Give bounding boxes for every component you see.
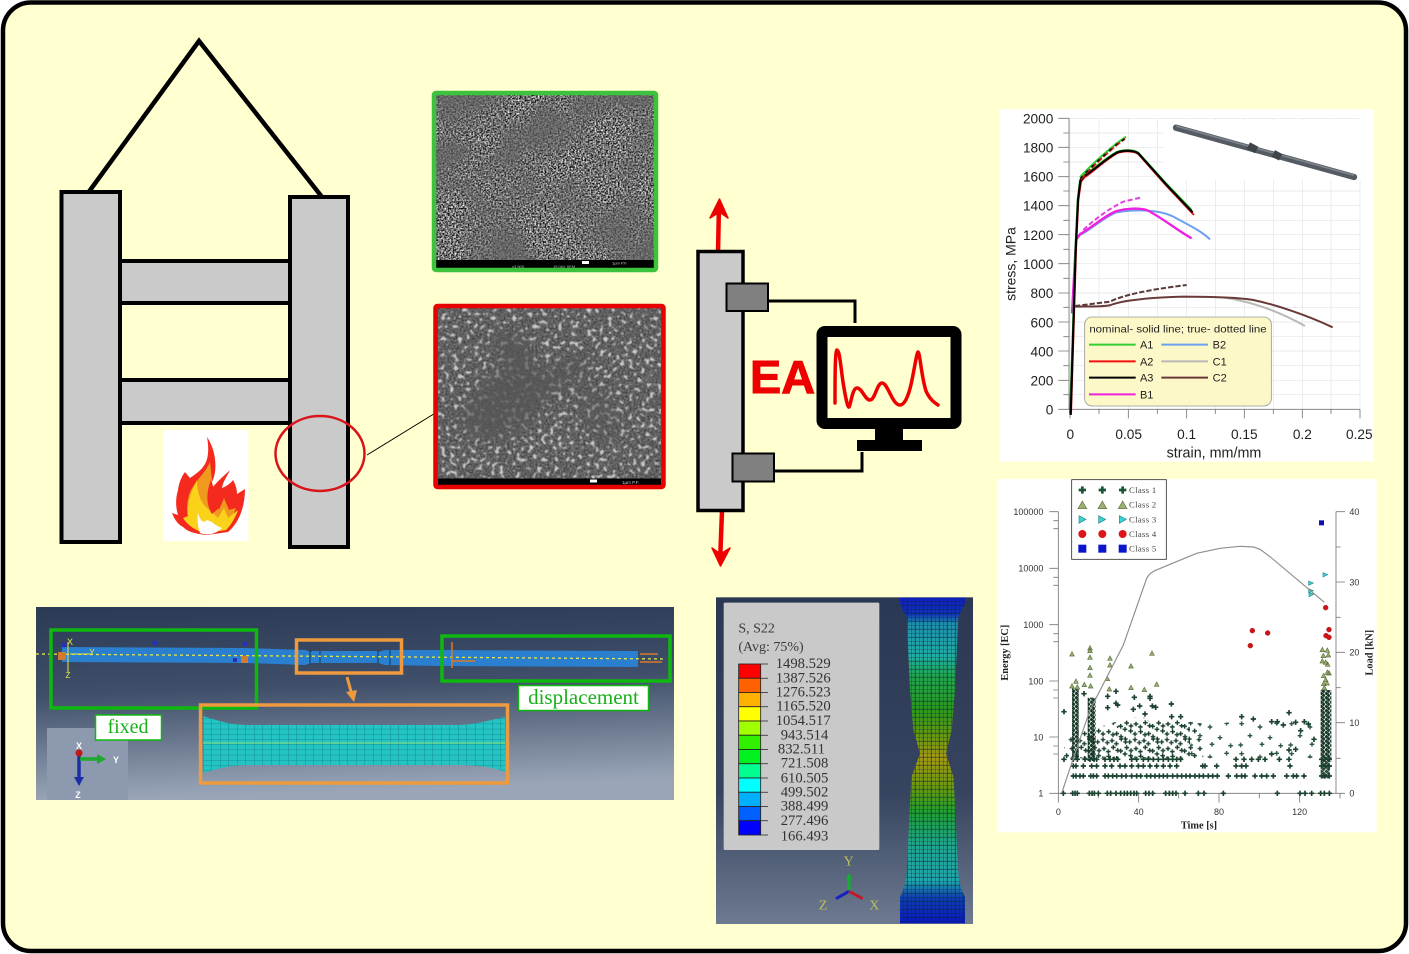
right axis labels: 20 (1349, 648, 1359, 658)
bottom axis labels: 40 (1134, 807, 1144, 817)
y axis labels: 1000 (1023, 257, 1054, 272)
colour scale values: 1276.523 (776, 685, 831, 701)
specimen bar (698, 252, 743, 510)
x axis title: strain, mm/mm (1167, 446, 1261, 462)
y axis labels: 1400 (1023, 199, 1054, 214)
colour scale values: 832.511 (778, 742, 825, 758)
legend: A3 (1140, 373, 1153, 385)
left axis labels: 100000 (1013, 507, 1043, 517)
x axis labels: 0.15 (1231, 427, 1258, 442)
colour scale values: 721.508 (781, 755, 828, 771)
legend: Class 1 (1129, 485, 1157, 495)
boundary markers: Y (89, 648, 95, 657)
left post (62, 192, 120, 542)
micrograph scale bar (436, 260, 654, 269)
y axis labels: 2000 (1023, 112, 1054, 127)
micrograph scale bar: 1µm P.F. (622, 480, 639, 485)
boundary markers (58, 637, 248, 680)
panel: finite element model setup (36, 607, 674, 800)
legend: C2 (1213, 373, 1227, 385)
load arrows (452, 642, 662, 668)
left axis labels: 100 (1028, 676, 1043, 686)
mesh detail (203, 716, 505, 773)
triad inset (47, 728, 128, 800)
legend title: (Avg: 75%) (738, 640, 804, 655)
y axis labels: 0 (1046, 403, 1054, 418)
chart: stress strain curves (1000, 109, 1374, 462)
EA label: EA (750, 351, 815, 403)
y axis labels (1023, 112, 1054, 418)
lower sensor with wire (732, 452, 862, 482)
x axis labels: 0.05 (1115, 427, 1142, 442)
colour scale values: 1165.520 (776, 699, 831, 715)
legend: B2 (1213, 340, 1226, 352)
mesh detail frame (200, 705, 508, 783)
x axis labels: 0 (1067, 427, 1075, 442)
icon: monitor with signal (822, 332, 956, 451)
orientation triad: X (869, 898, 879, 913)
y axis labels: 400 (1031, 344, 1054, 359)
series: A1 A2 A3 (1070, 137, 1194, 415)
colour scale values: 943.514 (781, 728, 829, 744)
bottom axis labels: 120 (1292, 807, 1307, 817)
axis titles (1000, 625, 1376, 831)
bottom axis labels: 80 (1214, 807, 1224, 817)
displacement region box (442, 636, 670, 681)
gauge region box (296, 640, 402, 673)
axis titles: Load [kN] (1365, 630, 1376, 675)
y axis labels: 800 (1031, 286, 1054, 301)
axis titles: Energy [EC] (1000, 625, 1011, 681)
micrograph scale bar (438, 478, 661, 486)
y axis labels: 200 (1031, 374, 1054, 389)
legend: Class 5 (1129, 544, 1157, 554)
fixed region box (51, 630, 256, 708)
axis titles: Time [s] (1181, 820, 1217, 831)
right axis labels: 40 (1349, 507, 1359, 517)
panel: stress contour result (716, 597, 973, 924)
icon: cylindrical rod (1176, 126, 1354, 177)
label: displacement: displacement (528, 685, 639, 709)
legend: C1 (1213, 356, 1227, 368)
upper sensor with wire (726, 284, 855, 323)
class 1 scatter (1063, 688, 1331, 793)
arrow: gauge to mesh detail (346, 677, 357, 702)
panel: acoustic emission setup (698, 199, 956, 566)
colour scale values: 166.493 (781, 828, 828, 844)
triad inset: Z (75, 790, 81, 800)
legend: B1 (1140, 389, 1153, 401)
left axis labels: 10 (1033, 732, 1043, 742)
legend (1085, 317, 1271, 406)
class 2 scatter (1070, 646, 1331, 692)
icon: fire (163, 430, 248, 541)
series: B1 and B2 (1072, 197, 1210, 313)
y axis labels: 600 (1031, 315, 1054, 330)
panel: lifting frame diagram (62, 41, 364, 547)
label: fixed: fixed (107, 716, 149, 738)
y axis labels: 1800 (1023, 141, 1054, 156)
colour scale values: 1054.517 (776, 713, 831, 729)
x axis labels: 0.2 (1293, 427, 1312, 442)
legend: Class 2 (1129, 500, 1157, 510)
legend title: S, S22 (738, 621, 775, 636)
necked specimen contour (900, 598, 965, 924)
colour scale values: 277.496 (781, 813, 828, 829)
y axis title: stress, MPa (1003, 227, 1019, 301)
colour scale (739, 664, 768, 835)
load curve (1062, 546, 1324, 793)
legend: A2 (1140, 356, 1153, 368)
triad inset: X (76, 741, 82, 751)
panel: red framed micrograph (436, 306, 664, 487)
y axis labels: 1600 (1023, 170, 1054, 185)
right axis labels: 0 (1349, 789, 1354, 799)
left axis labels: 1000 (1023, 620, 1043, 630)
orientation triad: Z (819, 898, 827, 913)
micrograph scale bar: x3,500 (512, 264, 525, 269)
colour scale values: 388.499 (781, 799, 828, 815)
legend (1072, 480, 1166, 559)
x axis labels: 0.1 (1177, 427, 1196, 442)
right axis labels: 30 (1349, 577, 1359, 587)
boundary markers: Z (66, 671, 71, 680)
colour scale values: 610.505 (781, 770, 828, 786)
y axis labels: 1200 (1023, 228, 1054, 243)
x axis labels: 0.25 (1346, 427, 1373, 442)
triad inset: Y (113, 755, 119, 765)
connector line from circle to micrograph (367, 412, 437, 455)
orientation triad: Y (844, 854, 854, 869)
colour scale values: 499.502 (781, 784, 828, 800)
left axis labels: 10000 (1018, 564, 1043, 574)
legend: Class 3 (1129, 514, 1157, 524)
axes and ticks (1049, 512, 1345, 803)
right axis labels (1349, 507, 1359, 799)
orientation triad (819, 854, 879, 913)
legend: A1 (1140, 340, 1153, 352)
right axis labels: 10 (1349, 718, 1359, 728)
series: C1 and C2 (1070, 285, 1333, 413)
colour scale values (776, 656, 831, 844)
panel: green framed micrograph (434, 93, 656, 270)
frame hanging triangle (88, 41, 322, 197)
colour scale values: 1498.529 (776, 656, 831, 672)
legend title (738, 621, 804, 655)
axes and ticks (1058, 118, 1360, 418)
arrow: top tension (710, 199, 728, 253)
boundary markers: X (67, 637, 73, 647)
arrow: bottom tension (712, 511, 730, 566)
chart: acoustic emission energy scatter (997, 479, 1377, 832)
bottom axis labels: 0 (1056, 807, 1061, 817)
micrograph scale bar: 1µm P.F. (612, 260, 627, 266)
class 5 scatter (1319, 520, 1324, 525)
legend box (724, 603, 879, 850)
class 4 scatter (1248, 605, 1331, 648)
red detail circle (276, 416, 364, 491)
colour scale values: 1387.526 (776, 670, 831, 686)
label: fixed (96, 715, 162, 740)
upper crossbar (119, 261, 291, 303)
legend: nominal- solid line; true- dotted line (1089, 324, 1267, 335)
bottom axis labels (1056, 807, 1307, 817)
left axis labels (1013, 507, 1043, 799)
blue specimen model (36, 642, 666, 672)
left axis labels: 1 (1038, 789, 1043, 799)
micrograph scale bar: 15.0kV SEM (553, 264, 575, 269)
x axis labels (1067, 427, 1373, 442)
right post (290, 197, 348, 547)
lower crossbar (119, 380, 291, 423)
class 3 scatter (1309, 573, 1328, 597)
legend: Class 4 (1129, 529, 1157, 539)
